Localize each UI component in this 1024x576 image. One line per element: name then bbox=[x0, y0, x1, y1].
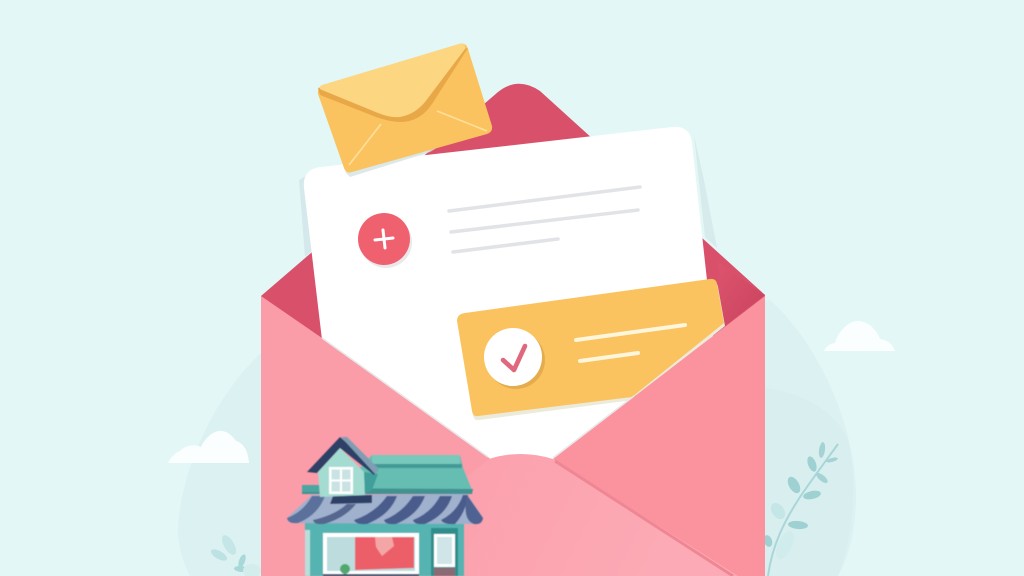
dormer bbox=[307, 437, 379, 497]
letter text lines bbox=[449, 187, 640, 252]
cloud: right bbox=[824, 321, 895, 351]
building left highlight bbox=[305, 530, 310, 576]
small envelope shadow bbox=[345, 146, 440, 177]
door bbox=[431, 528, 458, 576]
building body bbox=[305, 520, 464, 576]
card text lines bbox=[576, 325, 685, 361]
envelope front left flap bbox=[261, 296, 492, 576]
envelope inner shade bbox=[718, 262, 765, 328]
cloud: left bbox=[168, 431, 249, 463]
letter bbox=[304, 127, 731, 500]
icon: check badge bbox=[484, 328, 545, 389]
envelope back flap bbox=[261, 84, 765, 340]
letter shadow: left bbox=[299, 176, 313, 257]
icon: plus badge bbox=[358, 213, 412, 268]
plant: left bbox=[209, 533, 261, 576]
main roof bbox=[302, 455, 473, 494]
striped awning bbox=[287, 494, 483, 524]
plant: right bbox=[762, 442, 838, 576]
storefront bbox=[287, 437, 483, 576]
shop window bbox=[323, 533, 419, 576]
yellow card bbox=[457, 279, 725, 420]
letter shadow: right bbox=[694, 135, 717, 248]
background circle bbox=[178, 300, 856, 576]
dormer window bbox=[329, 467, 353, 494]
icon: small yellow envelope bbox=[318, 44, 492, 172]
letter edge shadow on flaps bbox=[322, 338, 634, 458]
envelope bottom flap bbox=[340, 454, 738, 576]
envelope front right flap bbox=[553, 296, 765, 576]
